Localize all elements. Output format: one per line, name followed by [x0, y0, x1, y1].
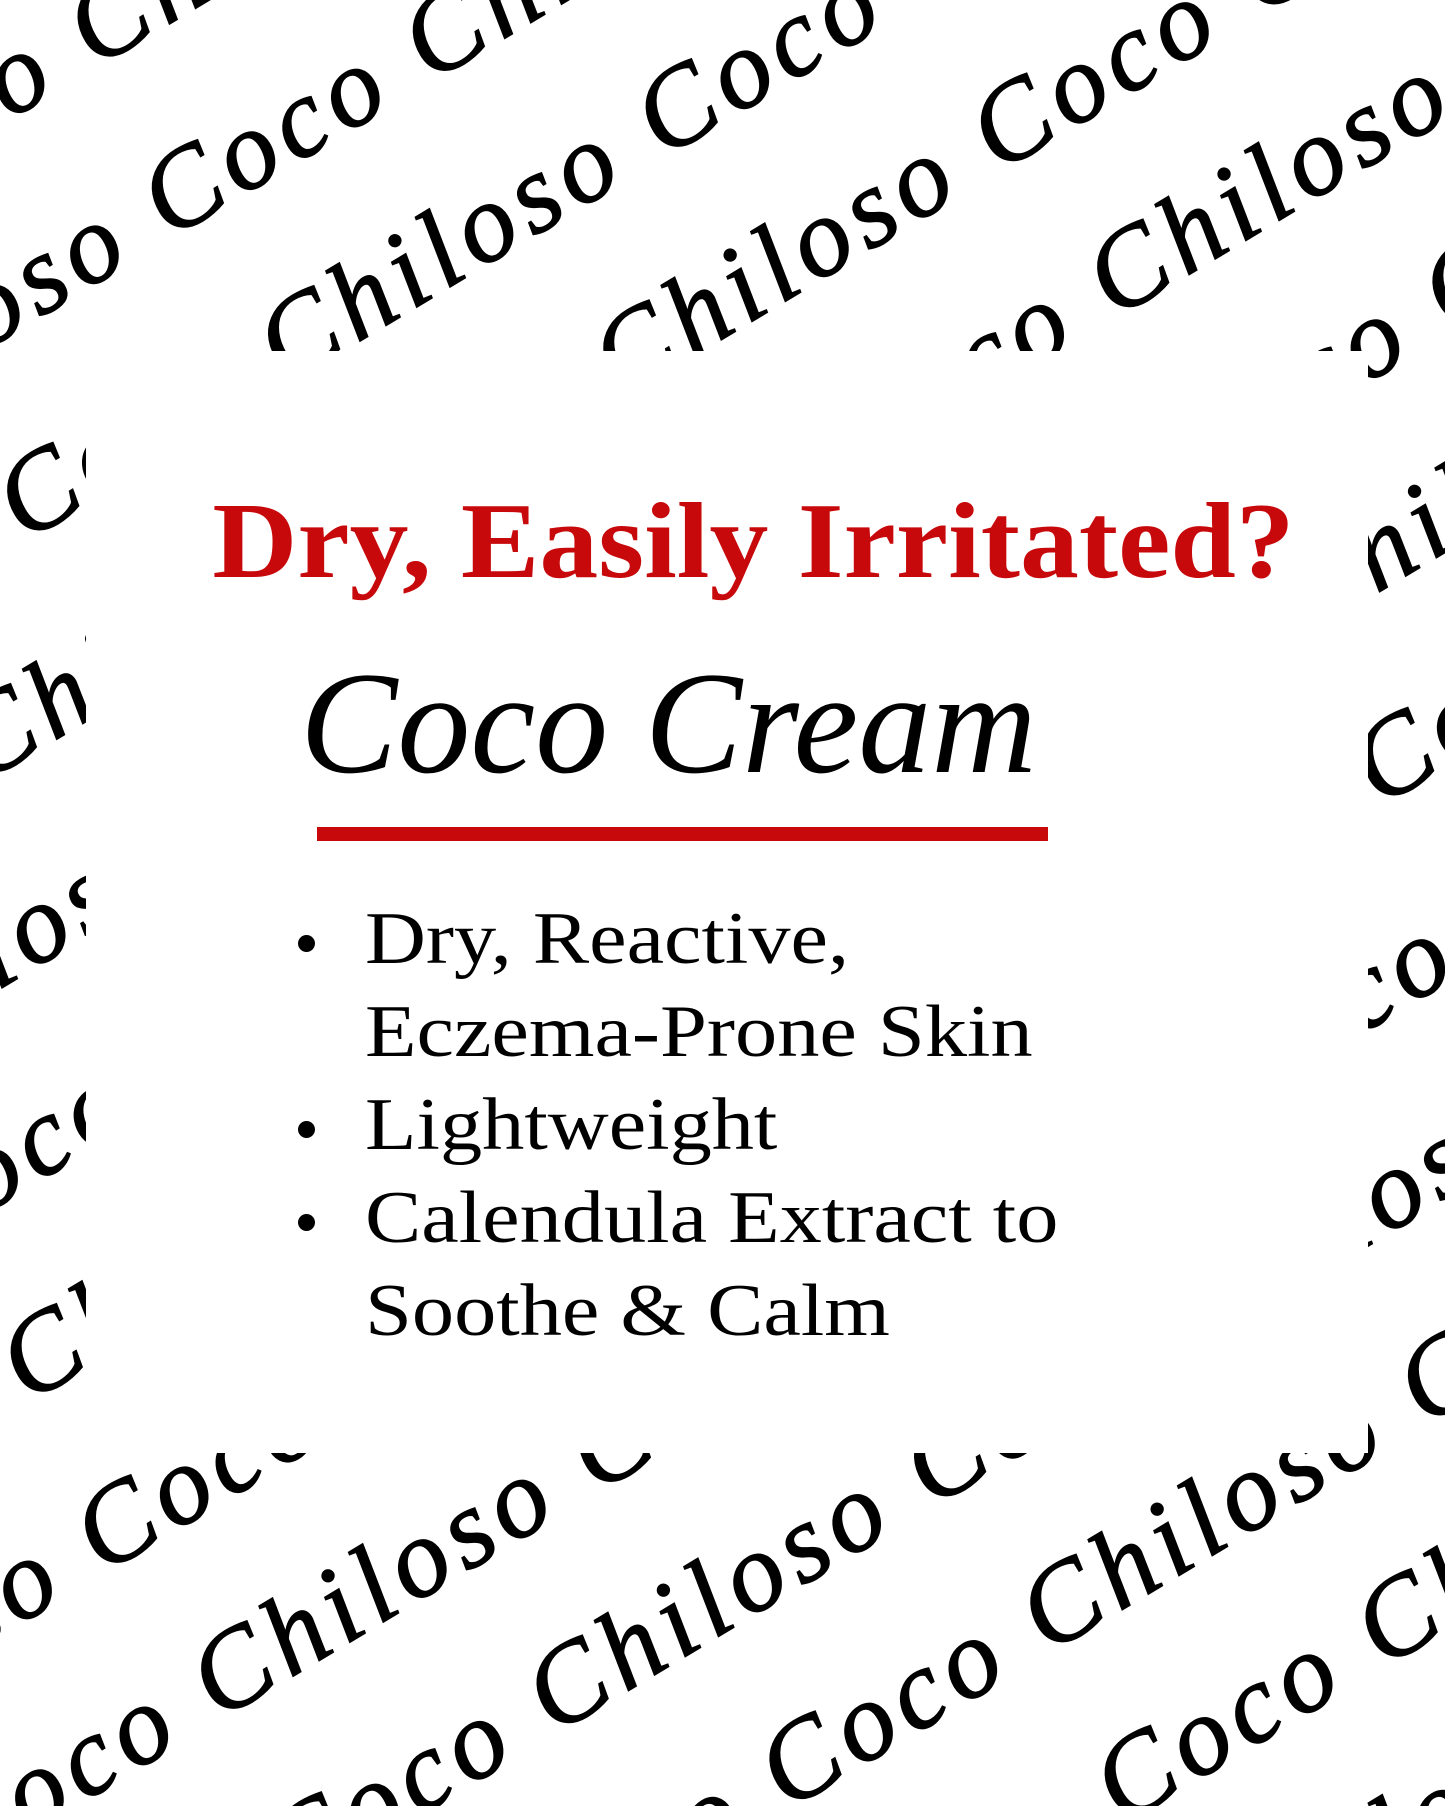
bullet: dry skin: Dry, Reactive, — [365, 898, 849, 980]
panel: white content box — [86, 351, 1368, 1453]
bullet: lightweight: Lightweight — [365, 1084, 777, 1166]
product name: Coco Cream — [300, 642, 1037, 804]
bullet: calendula — [290, 1172, 1290, 1358]
bullet: calendula: Soothe & Calm — [365, 1270, 890, 1352]
red underline — [317, 827, 1048, 841]
title: Dry, Easily Irritated? — [212, 482, 1295, 601]
bullet: dry skin — [290, 893, 1290, 1079]
bullet: calendula: Calendula Extract to — [365, 1177, 1058, 1259]
bullet list — [298, 898, 1058, 1352]
bullet: dry skin: Eczema-Prone Skin — [365, 991, 1033, 1073]
